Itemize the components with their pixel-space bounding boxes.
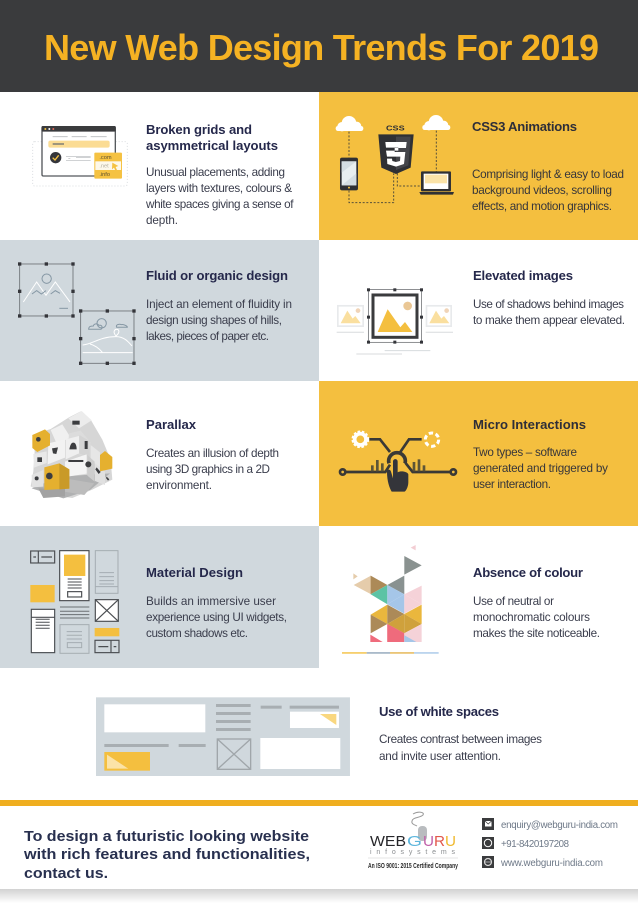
logo: WebGuru [368,812,458,870]
body text: design using shapes of hills, [146,314,282,327]
icon: elevated picture [337,288,453,354]
body text: and invite user attention. [379,750,501,763]
body text: to make them appear elevated. [473,314,625,327]
body text [146,298,292,343]
panel: elevated images [337,268,625,354]
body text [146,447,279,492]
body text [146,595,287,640]
call to action [23,828,310,882]
panel: material design [0,526,319,668]
body text: depth. [146,214,178,227]
body text: Unusual placements, adding [146,166,285,179]
panel: fluid design [0,240,319,381]
heading: Absence of colour [473,565,583,580]
call to action: with rich features and functionalities, [23,846,310,863]
body text: background videos, scrolling [472,184,612,197]
icon: UI widgets [30,551,119,653]
body text: Use of shadows behind images [473,298,624,311]
body text: lakes, pieces of paper etc. [146,330,269,343]
body text: environment. [146,479,212,492]
illustration: wireframe layout [96,697,350,776]
header band [0,0,638,92]
icon: css3 devices [336,115,454,203]
body text: makes the site noticeable. [473,627,600,640]
body text [145,166,294,227]
heading: Elevated images [473,268,573,283]
footer [0,800,638,903]
body text: Comprising light & easy to load [472,168,624,181]
logo: WebGuru: WEB [370,833,406,850]
panel: absence of colour [342,545,600,653]
body text: white spaces giving a sense of [145,198,294,211]
call to action: To design a futuristic looking website [24,828,309,845]
body text [473,446,608,491]
body text: Inject an element of fluidity in [146,298,292,311]
logo: WebGuru: infosystems [370,849,456,856]
body text: generated and triggered by [473,462,608,475]
icon: triangle mosaic [342,545,439,653]
body text: Creates contrast between images [379,733,542,746]
panel: white spaces [96,697,542,776]
body text: Creates an illusion of depth [146,447,279,460]
icon: browser window [33,126,127,186]
body text: Two types – software [473,446,577,459]
heading: Micro Interactions [473,417,586,432]
contact: website: www.webguru-india.com [500,858,603,869]
body text: experience using UI widgets, [146,611,287,624]
icon: 3D cube of tiles [31,411,112,498]
logo: WebGuru: An ISO 9001: 2015 Certified Company [368,861,458,870]
icon: browser window: .com [99,155,112,161]
contact: phone: +91-8420197208 [501,839,569,850]
panel: parallax [31,411,279,498]
icon: browser window: .info [99,172,110,178]
body text: monochromatic colours [473,611,590,624]
heading: Material Design [146,565,243,580]
body text [473,595,600,640]
title: New Web Design Trends For 2019 [44,27,599,68]
body text [473,298,625,327]
heading: CSS3 Animations [472,119,577,134]
body text [379,733,542,763]
body text: layers with textures, colours & [146,182,292,195]
panel: css3 animations [319,92,638,240]
body text: effects, and motion graphics. [472,200,612,213]
call to action: contact us. [24,865,108,882]
icon: browser window: .net [99,164,109,170]
heading: Broken grids and [146,122,252,137]
icon: css3 devices: CSS [386,124,405,133]
panel: broken grids [0,92,319,240]
heading: Use of white spaces [379,704,499,719]
panel: broken grids: asymmetrical layouts [146,138,278,153]
body text: custom shadows etc. [146,627,248,640]
icon: touch circuit [340,431,456,492]
contact: email: enquiry@webguru-india.com [501,820,618,831]
heading: Fluid or organic design [146,268,288,283]
body text: Builds an immersive user [146,595,276,608]
logo: WebGuru: G [407,833,422,850]
logo: WebGuru: U [423,833,434,850]
panel: micro interactions [319,381,638,526]
body text: Use of neutral or [473,595,554,608]
heading: Parallax [146,417,197,432]
body text: using 3D graphics in a 2D [146,463,270,476]
logo: WebGuru: U [445,833,456,850]
body text: user interaction. [473,478,551,491]
contact: phone [482,837,569,850]
body text [472,168,624,213]
logo: WebGuru: R [434,833,445,850]
icon: bounding boxes with landscapes [18,262,136,365]
